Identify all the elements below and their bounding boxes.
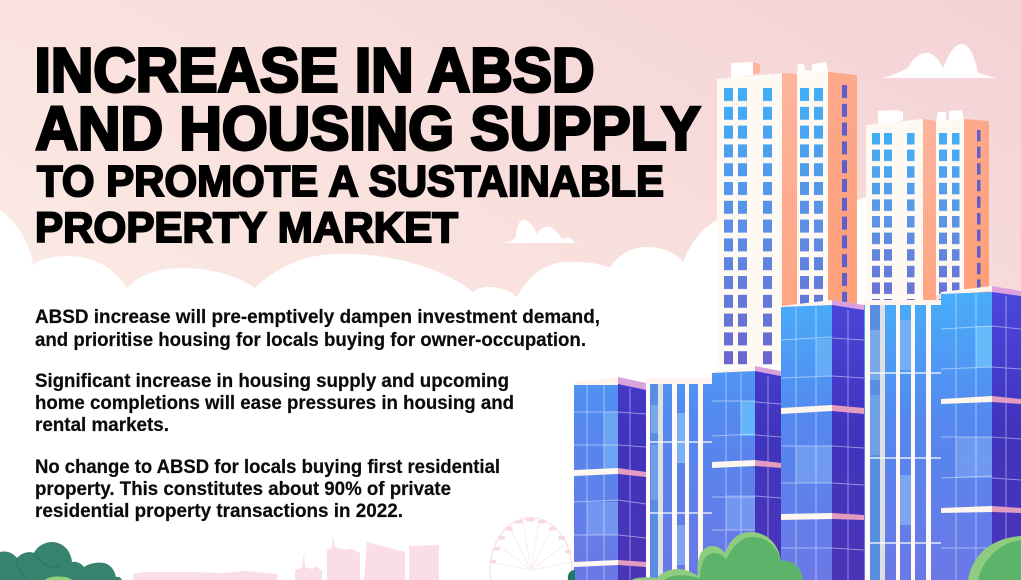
text block: housing supply: Significant increase in housing supply and upcoming (35, 371, 509, 392)
blue building 4 (781, 300, 864, 580)
text block: ABSD increase (35, 307, 600, 351)
blue building 1 (574, 377, 646, 580)
text block: no change to ABSD (35, 457, 500, 522)
text block: housing supply: home completions will ease pressures in housing and (35, 393, 514, 414)
white cloud bank (0, 210, 717, 580)
text block: ABSD increase: ABSD increase will pre-emptively dampen investment demand, (35, 307, 600, 328)
tower: rear right (866, 110, 989, 305)
tree: bottom left (0, 542, 122, 580)
blue building 5: striped (864, 300, 941, 580)
blue building 6 (941, 286, 1021, 580)
tower windows (724, 88, 823, 364)
blue building 3 (712, 366, 781, 580)
cloud behind towers (717, 197, 866, 400)
text block: housing supply: rental markets. (35, 415, 169, 436)
title: TO PROMOTE A SUSTAINABLE (37, 157, 664, 206)
text block: ABSD increase: and prioritise housing for locals buying for owner-occupation. (35, 330, 586, 351)
text block: housing supply (35, 371, 514, 436)
title: INCREASE IN ABSD (34, 36, 594, 106)
text block: no change to ABSD: No change to ABSD for locals buying first residential (35, 457, 500, 478)
tree: right (968, 536, 1021, 580)
tower: rear left (717, 62, 857, 370)
text block: no change to ABSD: residential property transactions in 2022. (35, 501, 403, 522)
skyline silhouette (133, 535, 439, 580)
tower side strip (977, 130, 980, 295)
blue building 2: striped (646, 378, 712, 580)
tree: small dark (568, 570, 575, 580)
title (34, 36, 700, 252)
small cloud: top right (882, 44, 997, 78)
ferris wheel (490, 518, 572, 580)
tower windows (868, 128, 963, 303)
title: AND HOUSING SUPPLY (36, 94, 700, 164)
tower side strip (842, 85, 847, 310)
text block: no change to ABSD: property. This constitutes about 90% of private (35, 479, 451, 500)
tree: centre bush (632, 532, 803, 580)
title: PROPERTY MARKET (35, 204, 458, 252)
small cloud: centre (503, 220, 579, 243)
